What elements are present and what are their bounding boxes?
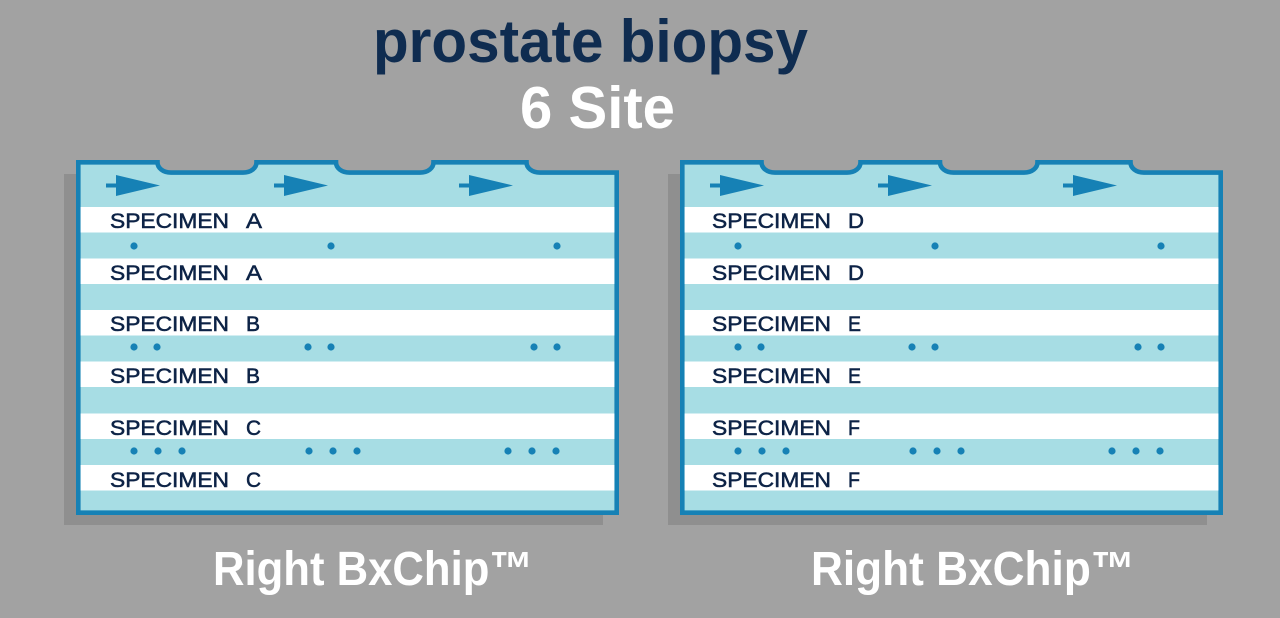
right chip specimen labels: SPECIMEN — [712, 261, 831, 285]
left chip caption: Right BxChip™ — [213, 543, 533, 596]
left chip specimen labels — [110, 209, 263, 492]
left chip specimen labels: SPECIMEN — [110, 312, 229, 336]
right chip specimen labels: SPECIMEN — [712, 468, 831, 492]
left chip dots — [130, 242, 561, 455]
right chip body — [682, 162, 1221, 513]
right chip shadow — [668, 174, 1207, 525]
left chip specimen labels: A — [246, 209, 263, 233]
right chip specimen labels: SPECIMEN — [712, 209, 831, 233]
right chip specimen labels: F — [848, 468, 860, 492]
right chip specimen labels — [712, 209, 864, 492]
left chip specimen labels: SPECIMEN — [110, 364, 229, 388]
right chip specimen labels: D — [848, 209, 864, 233]
left chip specimen labels: SPECIMEN — [110, 209, 229, 233]
right chip dots — [734, 242, 1165, 455]
left chip direction arrows — [106, 175, 513, 196]
right chip specimen labels: E — [848, 364, 861, 388]
right chip specimen labels: D — [848, 261, 864, 285]
right chip white rows — [685, 207, 1218, 490]
left chip specimen labels: B — [246, 312, 260, 336]
right chip caption: Right BxChip™ — [811, 543, 1135, 596]
left chip specimen labels: SPECIMEN — [110, 416, 229, 440]
right chip specimen labels: F — [848, 416, 860, 440]
panel: right chip — [668, 162, 1221, 525]
left chip shadow — [64, 174, 603, 525]
right chip specimen labels: E — [848, 312, 861, 336]
panel: left chip — [64, 162, 617, 525]
right chip direction arrows — [710, 175, 1117, 196]
right chip specimen labels: SPECIMEN — [712, 312, 831, 336]
subtitle: 6 Site — [520, 75, 675, 141]
title: prostate biopsy — [373, 8, 809, 75]
left chip specimen labels: SPECIMEN — [110, 261, 229, 285]
left chip white rows — [81, 207, 614, 490]
left chip specimen labels: C — [246, 468, 261, 492]
left chip specimen labels: B — [246, 364, 260, 388]
left chip specimen labels: SPECIMEN — [110, 468, 229, 492]
left chip body — [78, 162, 617, 513]
right chip specimen labels: SPECIMEN — [712, 416, 831, 440]
left chip specimen labels: C — [246, 416, 261, 440]
right chip specimen labels: SPECIMEN — [712, 364, 831, 388]
left chip specimen labels: A — [246, 261, 263, 285]
